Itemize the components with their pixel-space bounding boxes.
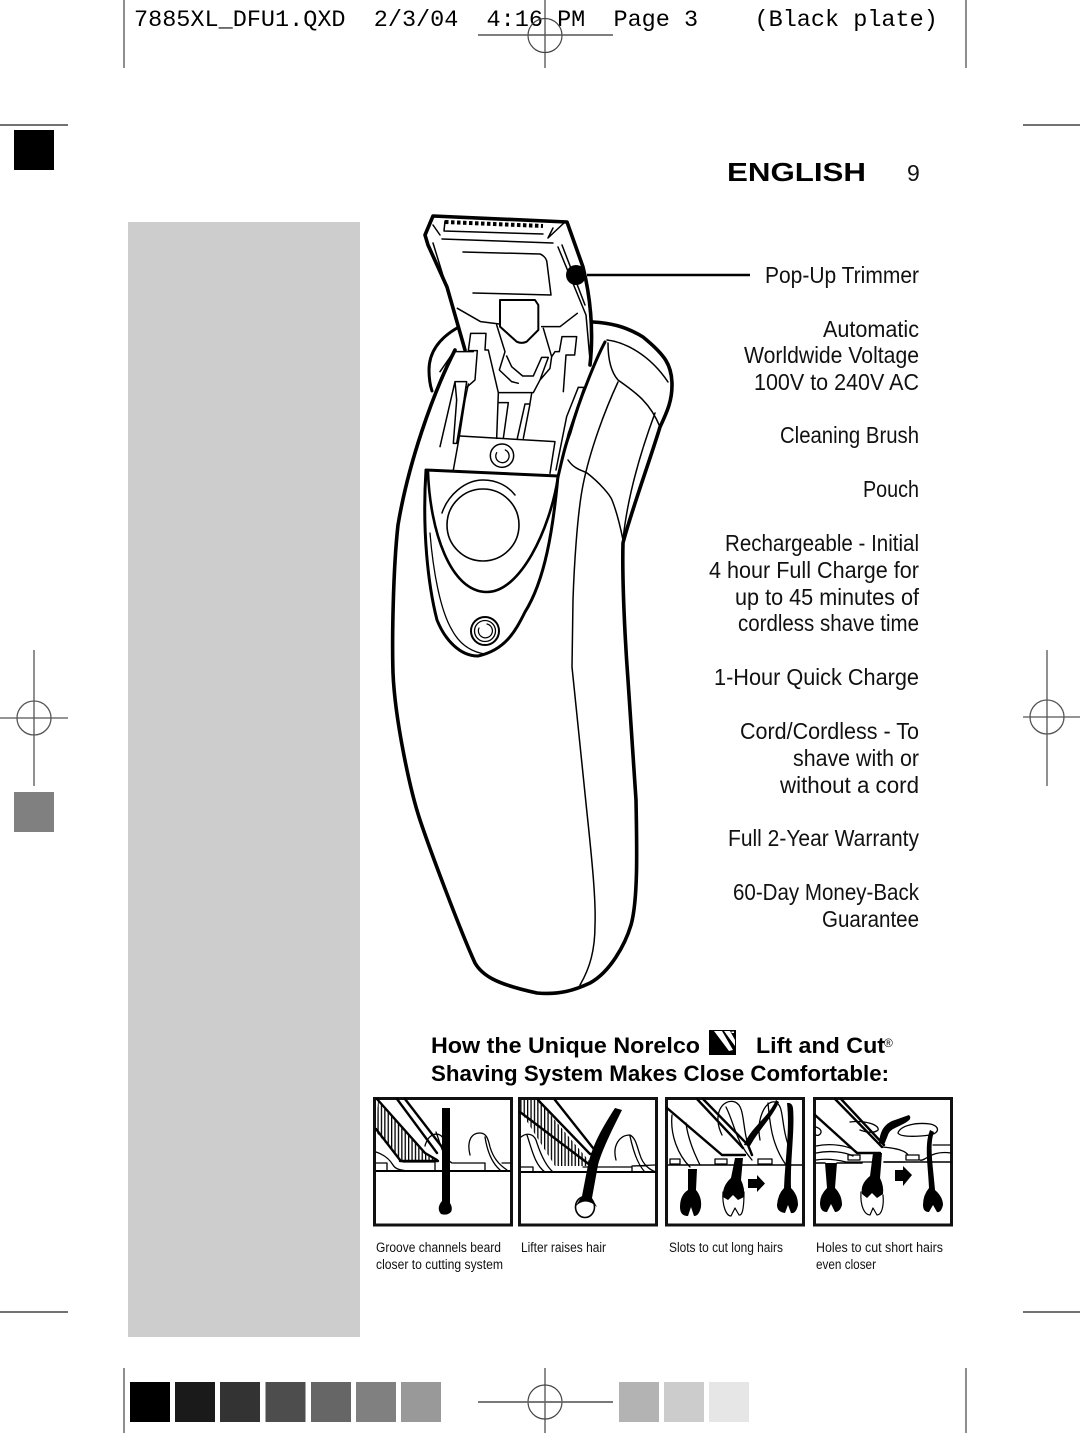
large circle on cover (447, 489, 519, 561)
arrow (748, 1175, 765, 1192)
hair (575, 1108, 622, 1207)
bottom crop and registration marks (0, 1312, 1080, 1433)
right slot (556, 387, 584, 475)
skin line (521, 1171, 656, 1173)
feature: cleaning brush: Cleaning Brush (780, 422, 919, 448)
feature: rechargeable: up to 45 minutes of (735, 584, 920, 610)
blades (815, 1099, 884, 1153)
shoulder lines (457, 308, 577, 327)
illustration: shaver with pop-up trimmer (393, 216, 750, 993)
bottom button (471, 617, 499, 645)
internal mechanism (440, 300, 584, 475)
heading: lift and cut: Shaving System Makes Close Comfortable: (431, 1061, 889, 1086)
centre stem (467, 325, 577, 393)
caption: slots to cut long hairs: Slots to cut long hairs (669, 1240, 783, 1255)
caption: groove channels beard (376, 1240, 503, 1272)
heading: English and page number: 9 (907, 160, 920, 186)
right registration mark (1023, 650, 1080, 786)
hair (439, 1108, 452, 1215)
heading: lift and cut: ® (884, 1036, 893, 1050)
feature: rechargeable: 4 hour Full Charge for (709, 557, 919, 583)
heading: lift and cut: How the Unique Norelco (431, 1033, 700, 1058)
skin line (376, 1170, 511, 1172)
shaver body outline (393, 322, 672, 993)
caption: holes to cut short hairs: even closer (816, 1257, 876, 1272)
caption: groove channels beard: Groove channels beard (376, 1240, 501, 1255)
top crop and registration marks (0, 0, 1080, 125)
long body line (572, 382, 618, 985)
trimmer head outline (425, 216, 592, 365)
hair right (923, 1130, 943, 1212)
left registration mark (0, 650, 68, 786)
blades (520, 1100, 600, 1165)
pads and skin surface (816, 1153, 951, 1162)
follicle outline (723, 1192, 744, 1216)
left rear lobe (429, 328, 457, 391)
feature: rechargeable: cordless shave time (738, 610, 919, 636)
sidebar panel (128, 222, 360, 1337)
heading: English and page number: ENGLISH (727, 157, 866, 187)
feature: guarantee: 60-Day Money-Back (733, 879, 919, 905)
hair follicle left (680, 1169, 701, 1216)
skin line (668, 1164, 802, 1166)
grayscale colour bar (130, 1382, 749, 1422)
cut hair piece (744, 1100, 779, 1146)
pads (670, 1159, 772, 1164)
lifter loops (672, 1101, 790, 1167)
lifter discs (816, 1122, 950, 1156)
feature: automatic voltage: Automatic (823, 316, 919, 342)
feature: cord/cordless: without a cord (779, 772, 919, 798)
diagram: holes cut short hairs (814, 1098, 952, 1225)
feature: automatic voltage: Worldwide Voltage (744, 342, 919, 368)
feature: quick charge: 1-Hour Quick Charge (714, 664, 919, 690)
heading: lift and cut: Lift and Cut (756, 1033, 886, 1058)
arc over circle (442, 480, 515, 513)
feature: automatic voltage: 100V to 240V AC (754, 369, 919, 395)
caption: lifter raises hair: Lifter raises hair (521, 1240, 606, 1255)
hair right (777, 1103, 798, 1213)
hatching (376, 1101, 435, 1160)
front cover outline (425, 470, 558, 656)
feature: guarantee: Guarantee (822, 906, 919, 932)
feature: pouch: Pouch (863, 476, 919, 502)
left square marks (14, 130, 54, 832)
trimmer blade teeth (445, 222, 543, 226)
feature: rechargeable (709, 530, 920, 636)
cover secondary line (430, 533, 485, 654)
cut hair piece (879, 1115, 910, 1145)
hair follicle left (820, 1163, 842, 1212)
pop-up trimmer pointer dot and leader (566, 265, 586, 285)
lower box (460, 436, 555, 473)
feature: automatic voltage (744, 316, 919, 395)
lifters and pads (376, 1132, 511, 1171)
trimmer head details (433, 221, 590, 360)
feature: warranty: Full 2-Year Warranty (728, 825, 919, 851)
inner cover curve (428, 472, 558, 592)
heading: English and page number (727, 157, 920, 187)
caption: holes to cut short hairs: Holes to cut short hairs (816, 1240, 943, 1255)
lifters and pads (521, 1134, 656, 1172)
diagram: slots cut long hairs (666, 1098, 804, 1225)
feature: cord/cordless (740, 718, 919, 798)
icon: Norelco logo (709, 1030, 736, 1055)
right shell edge (558, 342, 605, 477)
caption: holes to cut short hairs (816, 1240, 943, 1272)
heading: lift and cut (431, 1033, 893, 1086)
diagram: groove channels beard (374, 1098, 512, 1225)
side panel lines (568, 340, 668, 540)
small button on panel (490, 444, 514, 467)
lift arms (497, 393, 532, 438)
left slot (440, 350, 473, 470)
feature: cord/cordless: Cord/Cordless - To (740, 718, 919, 744)
trimmer centre tab (500, 300, 538, 343)
blades (667, 1099, 752, 1155)
hatching (521, 1100, 590, 1166)
hair follicle (576, 1196, 594, 1218)
hair follicle centre (862, 1153, 883, 1198)
feature list (709, 262, 920, 932)
caption: groove channels beard: closer to cutting system (376, 1257, 503, 1272)
feature: rechargeable: Rechargeable - Initial (725, 530, 919, 556)
feature: guarantee (733, 879, 919, 932)
blades (376, 1099, 442, 1161)
feature: cord/cordless: shave with or (793, 745, 919, 771)
hair follicle centre (723, 1158, 744, 1200)
print slug header text: 7885XL_DFU1.QXD 2/3/04 4:16 PM Page 3 (Black plate) (134, 7, 938, 34)
arrow (895, 1166, 912, 1186)
follicle outline (861, 1192, 883, 1215)
diagram: lifter raises hair (520, 1098, 656, 1225)
feature: pop-up trimmer: Pop-Up Trimmer (765, 262, 919, 288)
